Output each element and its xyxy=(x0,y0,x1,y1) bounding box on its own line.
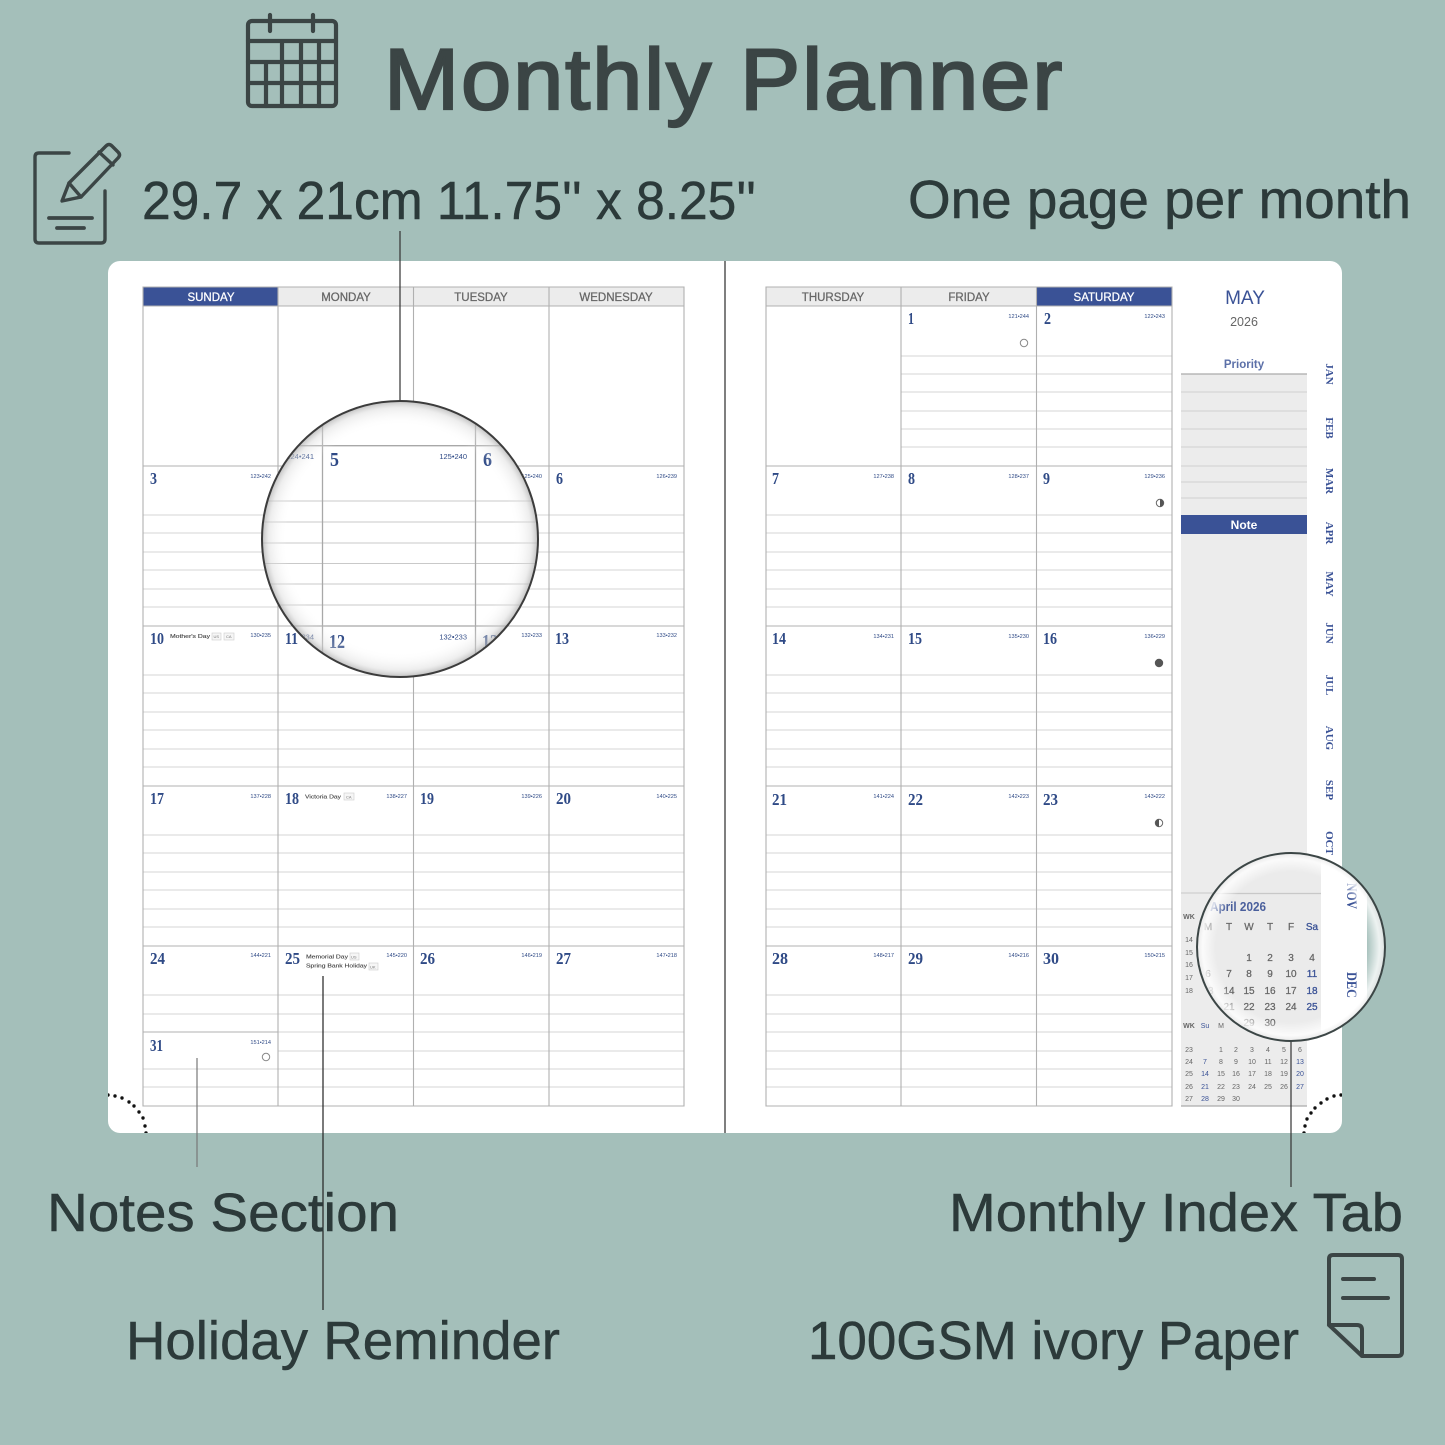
mini calendar: June 2026: 26 xyxy=(1185,1084,1193,1091)
panel: open planner xyxy=(106,261,1343,1135)
day numbers left: 18 xyxy=(285,789,299,808)
day-of-year numbers right: 136•229 xyxy=(1144,634,1165,640)
day numbers right xyxy=(772,309,1059,968)
day-of-year numbers right: 134•231 xyxy=(873,634,894,640)
mini calendar: April 2026: 4 xyxy=(1309,953,1315,964)
day numbers left xyxy=(150,469,571,1055)
mini calendar: June 2026: 2 xyxy=(1234,1047,1238,1054)
holiday notes: CA xyxy=(226,634,232,639)
monthly index tabs: SEP xyxy=(1323,780,1335,800)
mini calendar: June 2026: 13 xyxy=(1296,1059,1304,1066)
mini calendar: June 2026: 24 xyxy=(1185,1059,1193,1066)
day-of-year numbers right: 150•215 xyxy=(1144,953,1165,959)
day-of-year numbers left: 139•226 xyxy=(521,794,542,800)
day numbers left: 26 xyxy=(420,949,435,968)
magnifier: day cells: 124•241 xyxy=(286,452,314,461)
day numbers right: 1 xyxy=(908,309,914,328)
monthly index tabs xyxy=(1323,363,1335,856)
day-of-year numbers left: 125•240 xyxy=(521,474,542,480)
mini calendar: June 2026: Su xyxy=(1201,1023,1209,1030)
mini calendar: June 2026: 11 xyxy=(1264,1059,1272,1066)
day-of-year numbers right: 127•238 xyxy=(873,474,894,480)
mini calendar: June 2026: 23 xyxy=(1232,1084,1240,1091)
icon: paper sheet xyxy=(1329,1255,1402,1356)
mini calendar: April 2026 xyxy=(1202,900,1319,1029)
holiday notes: Mother's Day xyxy=(170,634,210,640)
day-of-year numbers left: 145•220 xyxy=(386,953,407,959)
day-of-year numbers left: 151•214 xyxy=(250,1040,271,1046)
mini calendar week numbers: 18 xyxy=(1185,988,1193,995)
day numbers right: 30 xyxy=(1043,949,1059,968)
month heading: MAY xyxy=(1225,288,1265,309)
day-of-year numbers right: 128•237 xyxy=(1008,474,1029,480)
mini calendar: April 2026: T xyxy=(1267,922,1273,933)
mini calendar: June 2026: 28 xyxy=(1201,1096,1209,1103)
mini calendar week numbers: WK xyxy=(1183,914,1195,921)
day numbers right: 2 xyxy=(1044,309,1051,328)
mini calendar: June 2026: 14 xyxy=(1201,1071,1209,1078)
day numbers left: 17 xyxy=(150,789,164,808)
monthly index tabs: JUL xyxy=(1323,675,1335,695)
mini calendar: June 2026: 3 xyxy=(1250,1047,1254,1054)
day-of-year numbers left: 138•227 xyxy=(386,794,407,800)
weekday headers right: FRIDAY xyxy=(948,292,990,304)
holiday notes: Spring Bank Holiday xyxy=(306,964,367,970)
day-of-year numbers right: 121•244 xyxy=(1008,314,1029,320)
year: 2026 xyxy=(1230,315,1258,329)
day-of-year numbers right: 149•216 xyxy=(1008,953,1029,959)
weekday headers left: SUNDAY xyxy=(187,292,235,304)
mini calendar: April 2026: M xyxy=(1204,922,1212,933)
mini calendar: June 2026: 4 xyxy=(1266,1047,1270,1054)
magnifier: day cells: 125•240 xyxy=(439,452,467,461)
note area xyxy=(1181,534,1307,1106)
day-of-year numbers left: 133•232 xyxy=(656,633,677,639)
mini calendar: June 2026: 24 xyxy=(1248,1084,1256,1091)
mini calendar: June 2026: 5 xyxy=(1282,1047,1286,1054)
day numbers left: 19 xyxy=(420,789,434,808)
mini calendar: April 2026: 15 xyxy=(1243,986,1255,997)
mini calendar week numbers: 14 xyxy=(1185,937,1193,944)
mini calendar: June 2026: 26 xyxy=(1280,1084,1288,1091)
mini calendar: June 2026: 7 xyxy=(1203,1059,1207,1066)
leader: notes section xyxy=(196,1058,198,1167)
left page calendar xyxy=(143,287,684,1106)
mini calendar week numbers xyxy=(1183,914,1195,995)
mini calendar: June 2026: 25 xyxy=(1264,1084,1272,1091)
mini calendar: April 2026: T xyxy=(1226,922,1232,933)
mini calendar: April 2026: 24 xyxy=(1285,1002,1297,1013)
weekday headers right: THURSDAY xyxy=(802,292,865,304)
day numbers left: 25 xyxy=(285,949,300,968)
note header: Note xyxy=(1231,518,1258,532)
day-of-year numbers left: 140•225 xyxy=(656,794,677,800)
mini calendar: June 2026: M xyxy=(1218,1023,1224,1030)
holiday notes: US xyxy=(351,954,357,960)
weekday headers left: WEDNESDAY xyxy=(579,292,653,304)
mini calendar: June 2026 xyxy=(1183,1023,1304,1103)
mini calendar: April 2026: 13 xyxy=(1202,986,1214,997)
day-of-year numbers left: 123•242 xyxy=(250,474,271,480)
mini calendar: June 2026: 15 xyxy=(1217,1071,1225,1078)
leader: index tab xyxy=(1290,1040,1292,1187)
day-of-year numbers left: 147•218 xyxy=(656,953,677,959)
mini calendar: June 2026: 21 xyxy=(1201,1084,1209,1091)
mini calendar: April 2026: 16 xyxy=(1264,986,1276,997)
monthly index tabs: AUG xyxy=(1323,726,1335,751)
day numbers left: 31 xyxy=(150,1036,163,1055)
label: monthly index tab: Monthly Index Tab xyxy=(949,1183,1403,1243)
magnifier: day cells: 12 xyxy=(329,631,345,653)
monthly index tabs: OCT xyxy=(1323,831,1335,856)
icon: note with pencil xyxy=(35,144,120,243)
day-of-year numbers right: 129•236 xyxy=(1144,474,1165,480)
note header xyxy=(1181,515,1307,534)
pages label: One page per month xyxy=(908,170,1411,230)
day-of-year numbers left: 137•228 xyxy=(250,794,271,800)
mini calendar: April 2026: 30 xyxy=(1264,1018,1276,1029)
mini calendar: April 2026: 9 xyxy=(1267,969,1273,980)
magnified tabs: NOV xyxy=(1343,883,1359,909)
priority list xyxy=(1181,374,1307,515)
mini calendar: June 2026: 23 xyxy=(1185,1047,1193,1054)
mini calendar: April 2026: 14 xyxy=(1223,986,1235,997)
mini calendar: April 2026: 21 xyxy=(1223,1002,1235,1013)
mini calendar: April 2026: 6 xyxy=(1205,969,1211,980)
title: Monthly Planner xyxy=(384,31,1062,128)
weekday headers left: MONDAY xyxy=(321,292,371,304)
moon phases xyxy=(1020,339,1164,827)
mini calendar: April 2026: 18 xyxy=(1306,986,1318,997)
day numbers right: 7 xyxy=(772,469,779,488)
magnifier: day cells: 5 xyxy=(330,449,339,471)
day numbers left: 6 xyxy=(556,469,563,488)
day-of-year numbers right: 143•222 xyxy=(1144,794,1165,800)
mini calendar: June 2026: 9 xyxy=(1234,1059,1238,1066)
mini calendar: April 2026: 7 xyxy=(1226,969,1232,980)
day numbers right: 14 xyxy=(772,629,786,648)
day numbers right: 16 xyxy=(1043,629,1057,648)
mini calendar: June 2026: WK xyxy=(1183,1023,1195,1030)
day-of-year numbers right: 141•224 xyxy=(873,794,894,800)
day-of-year numbers right: 142•223 xyxy=(1008,794,1029,800)
holiday notes xyxy=(170,633,378,970)
page background xyxy=(108,261,1342,1133)
mini calendar: June 2026: 16 xyxy=(1232,1071,1240,1078)
holiday notes: UK xyxy=(370,964,376,970)
day numbers left: 27 xyxy=(556,949,571,968)
monthly index tabs: JAN xyxy=(1323,363,1335,385)
weekday headers left: TUESDAY xyxy=(454,292,508,304)
day numbers right: 22 xyxy=(908,790,923,809)
mini calendar: June 2026: 17 xyxy=(1248,1071,1256,1078)
day-of-year numbers left: 132•233 xyxy=(521,633,542,639)
magnifier: day cells xyxy=(262,400,540,680)
monthly index tabs: JUN xyxy=(1323,622,1335,644)
magnified tabs: DEC xyxy=(1343,972,1359,998)
mini calendar week numbers: 17 xyxy=(1185,975,1193,982)
day numbers left: 20 xyxy=(556,789,571,808)
page fold xyxy=(724,261,726,1133)
mini calendar: June 2026: 25 xyxy=(1185,1071,1193,1078)
mini calendar: June 2026: 30 xyxy=(1232,1096,1240,1103)
mini calendar: June 2026: 10 xyxy=(1248,1059,1256,1066)
mini calendar: June 2026: 20 xyxy=(1296,1071,1304,1078)
mini calendar: April 2026: W xyxy=(1244,922,1254,933)
holiday notes: US xyxy=(214,634,219,639)
monthly index tabs: APR xyxy=(1323,522,1335,545)
mini calendar: June 2026: 29 xyxy=(1217,1096,1225,1103)
weekday headers right xyxy=(766,287,1172,306)
mini calendar: April 2026: 22 xyxy=(1243,1002,1255,1013)
day numbers right: 28 xyxy=(772,949,788,968)
mini calendar: April 2026: 29 xyxy=(1243,1018,1255,1029)
mini calendar week numbers: 16 xyxy=(1185,962,1193,969)
leader: size to lens xyxy=(399,231,401,402)
holiday notes: CA xyxy=(346,794,352,800)
label: holiday reminder: Holiday Reminder xyxy=(126,1311,560,1371)
mini calendar: April 2026: 8 xyxy=(1246,969,1252,980)
label: notes section: Notes Section xyxy=(47,1183,399,1243)
mini calendar: June 2026: 12 xyxy=(1280,1059,1288,1066)
icon: calendar xyxy=(248,15,336,106)
monthly index tabs: MAR xyxy=(1323,468,1335,495)
day-of-year numbers left: 144•221 xyxy=(250,953,271,959)
mini calendar: April 2026: 10 xyxy=(1285,969,1297,980)
mini calendar: June 2026: 27 xyxy=(1185,1096,1193,1103)
weekday headers right: SATURDAY xyxy=(1074,292,1135,304)
mini calendar: April 2026: 25 xyxy=(1306,1002,1318,1013)
day-of-year numbers right: 135•230 xyxy=(1008,634,1029,640)
day-of-year numbers right: 148•217 xyxy=(873,953,894,959)
size label: 29.7 x 21cm 11.75'' x 8.25'' xyxy=(142,171,756,231)
magnifier: day cells: 131•234 xyxy=(286,632,314,642)
day numbers left: 13 xyxy=(555,629,569,648)
mini calendar: April 2026: 17 xyxy=(1285,986,1297,997)
day numbers right: 8 xyxy=(908,469,915,488)
mini calendar: April 2026: 23 xyxy=(1264,1002,1276,1013)
weekday headers left xyxy=(143,287,684,306)
mini calendar: April 2026: 11 xyxy=(1307,969,1318,980)
mini calendar week numbers: 15 xyxy=(1185,950,1193,957)
day numbers right: 21 xyxy=(772,790,787,809)
monthly index tabs: FEB xyxy=(1323,417,1335,439)
day-of-year numbers left: 146•219 xyxy=(521,953,542,959)
mini calendar: April 2026: 3 xyxy=(1288,953,1294,964)
mini calendar: April 2026: April 2026 xyxy=(1210,900,1266,914)
holiday notes: Memorial Day xyxy=(306,954,348,960)
day numbers left: 3 xyxy=(150,469,157,488)
day-of-year numbers right: 122•243 xyxy=(1144,314,1165,320)
mini calendar: June 2026: 8 xyxy=(1219,1059,1223,1066)
magnifier: day cells: 132•233 xyxy=(439,632,467,642)
day numbers left: 10 xyxy=(150,629,164,648)
mini calendar: June 2026: 1 xyxy=(1219,1047,1223,1054)
day numbers right: 23 xyxy=(1043,790,1058,809)
right page calendar xyxy=(766,287,1172,1106)
day-of-year numbers right xyxy=(873,314,1165,959)
mini calendar: June 2026: 22 xyxy=(1217,1084,1225,1091)
sidebar xyxy=(1181,288,1307,1106)
corner dots xyxy=(106,1093,1343,1135)
mini calendar: April 2026: 1 xyxy=(1246,953,1252,964)
mini calendar: June 2026: 27 xyxy=(1296,1084,1304,1091)
holiday notes: Victoria Day xyxy=(305,794,341,800)
mini calendar: April 2026: Sa xyxy=(1306,922,1319,933)
day numbers right: 15 xyxy=(908,629,922,648)
day-of-year numbers left xyxy=(250,474,677,1046)
mini calendar: June 2026: 6 xyxy=(1298,1047,1302,1054)
mini calendar: April 2026: 2 xyxy=(1267,953,1273,964)
moon phase: new moon xyxy=(262,1053,270,1061)
magnified tabs xyxy=(1347,883,1356,998)
day-of-year numbers left: 130•235 xyxy=(250,633,271,639)
magnifier: day cells: 6 xyxy=(483,449,492,471)
mini calendar: June 2026: 18 xyxy=(1264,1071,1272,1078)
leader: holiday reminder xyxy=(322,976,324,1310)
mini calendar: April 2026: F xyxy=(1288,922,1294,933)
label: paper: 100GSM ivory Paper xyxy=(808,1311,1299,1371)
priority heading: Priority xyxy=(1224,359,1265,371)
day numbers left: 24 xyxy=(150,949,165,968)
mini calendar: June 2026: 19 xyxy=(1280,1071,1288,1078)
day numbers right: 29 xyxy=(908,949,923,968)
magnifier: mini calendar and tabs xyxy=(1190,850,1390,1045)
day-of-year numbers left: 126•239 xyxy=(656,474,677,480)
monthly index tabs: MAY xyxy=(1323,571,1335,597)
day numbers left: 11 xyxy=(285,629,298,648)
day numbers right: 9 xyxy=(1043,469,1050,488)
magnifier: day cells: 13 xyxy=(482,631,498,653)
